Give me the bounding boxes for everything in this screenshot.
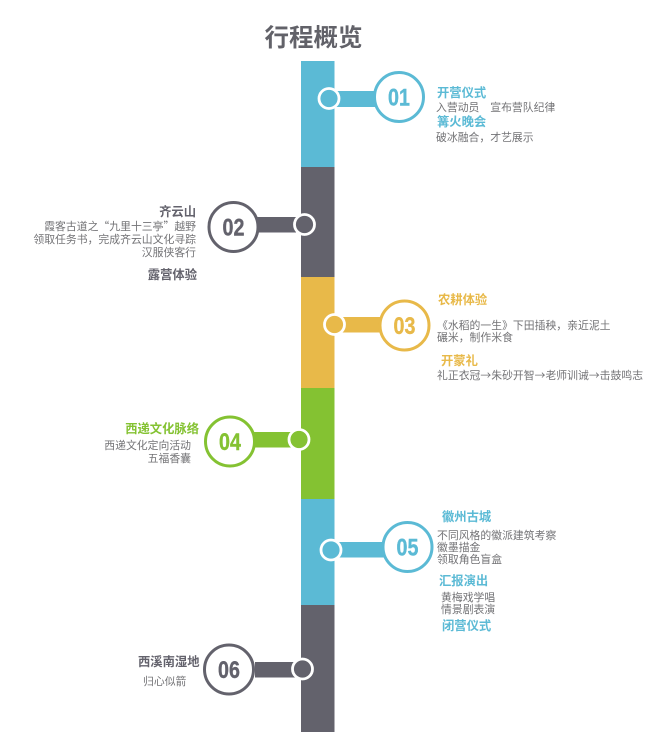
text block 05: 徽州古城 [442, 507, 492, 525]
marker 06 [204, 645, 312, 694]
text block 03: 农耕体验 [438, 290, 488, 308]
marker 06: 06 [218, 656, 240, 683]
marker 05: 05 [397, 534, 418, 561]
text block 01: 开营仪式 [437, 83, 487, 101]
marker 04 [206, 417, 309, 466]
marker 02 [209, 202, 314, 252]
marker 03 [324, 301, 429, 350]
text block 03: 碾米，制作米食 [437, 329, 513, 345]
timeline bar [301, 61, 334, 732]
text block 01 [436, 83, 555, 145]
marker 05 [321, 522, 432, 572]
text block 01: 篝火晚会 [437, 112, 487, 130]
text block 05: 闭营仪式 [442, 616, 492, 634]
text block 02: 霞客古道之“九里十三亭”越野 [44, 218, 196, 234]
text block 06 [138, 652, 200, 689]
text block 05: 不同风格的徽派建筑考察 [437, 527, 556, 543]
text block 06: 西溪南湿地 [138, 652, 200, 670]
text block 05: 汇报演出 [439, 571, 488, 589]
title: 行程概览 [264, 19, 362, 54]
text block 01: 破冰融合，才艺展示 [436, 129, 534, 145]
text block 03: 《水稻的一生》下田插秧，亲近泥土 [437, 317, 611, 333]
text block 02: 汉服侠客行 [142, 244, 196, 260]
text block 03 [437, 290, 643, 383]
marker 01: 01 [388, 84, 410, 111]
text block 05: 领取角色盲盒 [437, 551, 502, 567]
marker 01 [319, 72, 424, 122]
text block 01: 入营动员 宣布营队纪律 [436, 99, 555, 115]
text block 02: 领取任务书，完成齐云山文化寻踪 [33, 231, 196, 247]
text block 05 [437, 507, 556, 634]
text block 02 [33, 202, 198, 283]
text block 03: 礼正衣冠→朱砂开智→老师训诫→击鼓鸣志 [437, 367, 643, 383]
text block 02: 露营体验 [148, 265, 198, 283]
marker 03: 03 [394, 312, 415, 339]
marker 02: 02 [223, 214, 244, 241]
text block 04: 西递文化脉络 [125, 419, 199, 437]
text block 02: 齐云山 [159, 202, 196, 220]
text block 04 [104, 419, 199, 466]
text block 05: 徽墨描金 [437, 539, 481, 555]
text block 03: 开蒙礼 [441, 351, 478, 369]
marker 04: 04 [219, 428, 242, 455]
text block 05: 黄梅戏学唱 [441, 589, 495, 605]
text block 04: 五福香囊 [148, 450, 191, 466]
text block 06: 归心似箭 [143, 673, 187, 689]
text block 04: 西递文化定向活动 [104, 437, 191, 453]
text block 05: 情景剧表演 [441, 601, 495, 617]
